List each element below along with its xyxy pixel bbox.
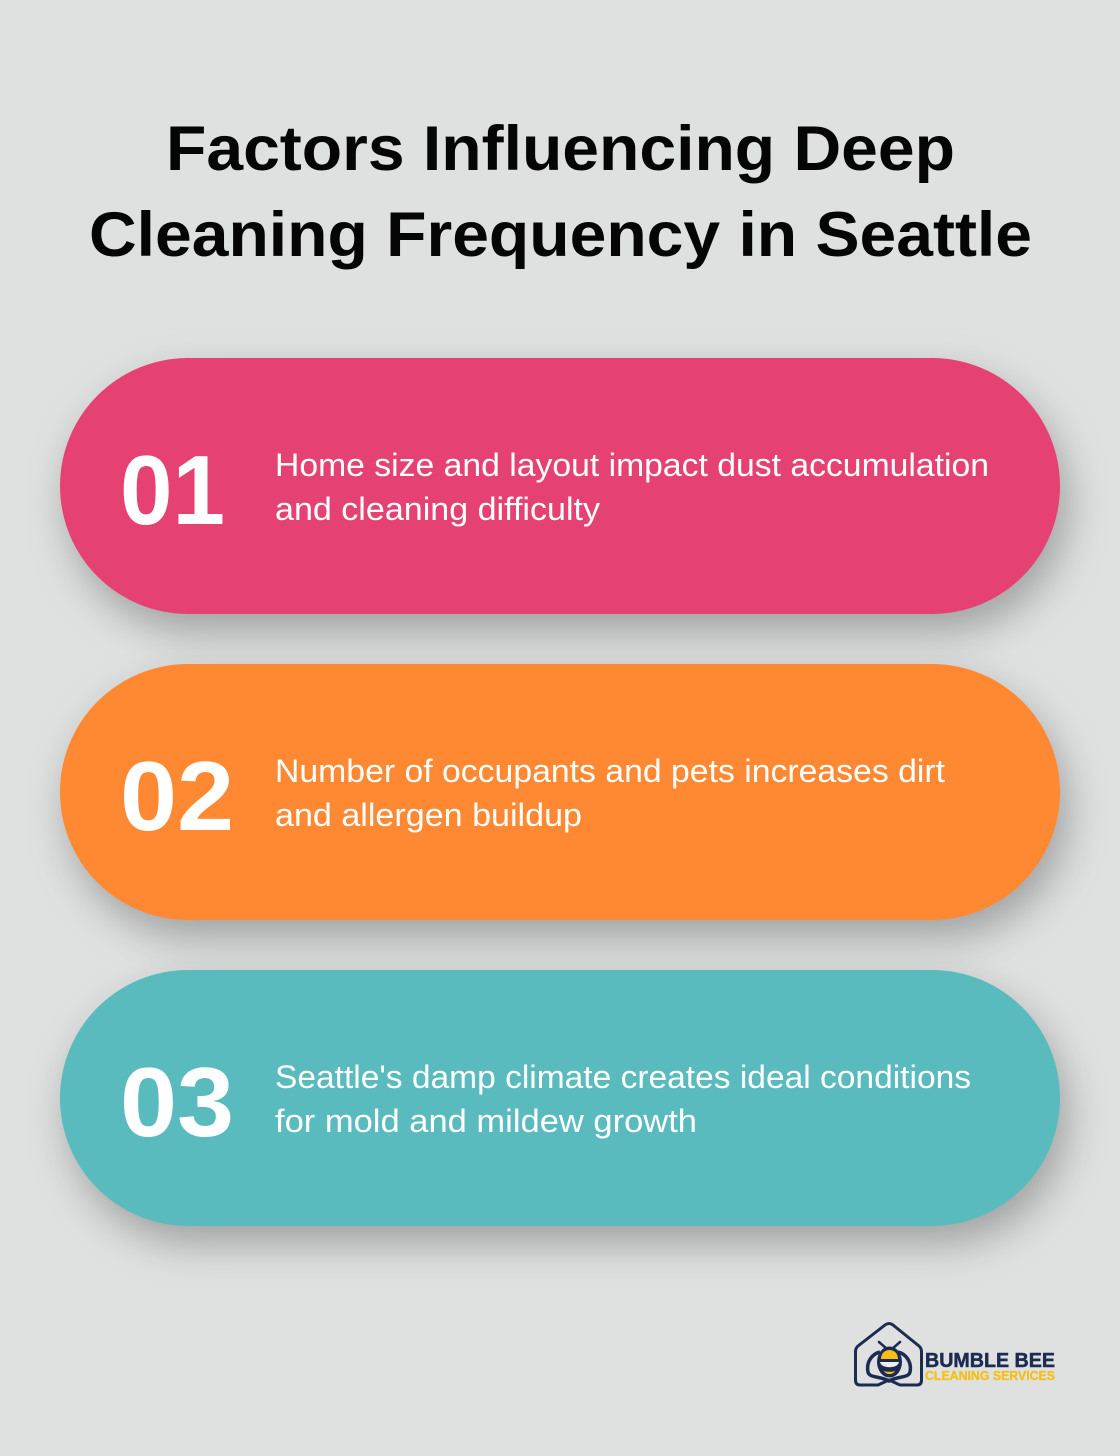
logo: Bumble Bee Cleaning Services [856, 1324, 1055, 1385]
text: factor 02: and allergen buildup [275, 797, 582, 833]
title: Factors Influencing Deep [166, 114, 955, 184]
title [89, 114, 1032, 270]
text: factor 03: for mold and mildew growth [275, 1103, 697, 1139]
tagline: CLEANING SERVICES [925, 1369, 1055, 1383]
text: factor 03: Seattle's damp climate creates ideal conditions [275, 1059, 971, 1095]
number 02: 02 [120, 741, 234, 851]
panel: factor 03 [60, 970, 1060, 1226]
text: factor 03 [275, 1059, 971, 1139]
title: Cleaning Frequency in Seattle [89, 200, 1032, 270]
text: factor 02: Number of occupants and pets increases dirt [275, 753, 945, 789]
number 01: 01 [120, 435, 225, 545]
wordmark: BUMBLE BEE [925, 1349, 1055, 1372]
icon: house outline [856, 1324, 922, 1385]
panel: factor 01 [60, 358, 1060, 614]
text: factor 01: and cleaning difficulty [275, 491, 600, 527]
text: factor 01: Home size and layout impact dust accumulation [275, 447, 989, 483]
text: factor 02 [275, 753, 945, 833]
number 03: 03 [120, 1047, 234, 1157]
icon: bee [868, 1342, 910, 1381]
panel: factor 02 [60, 664, 1060, 920]
text: factor 01 [275, 447, 989, 527]
